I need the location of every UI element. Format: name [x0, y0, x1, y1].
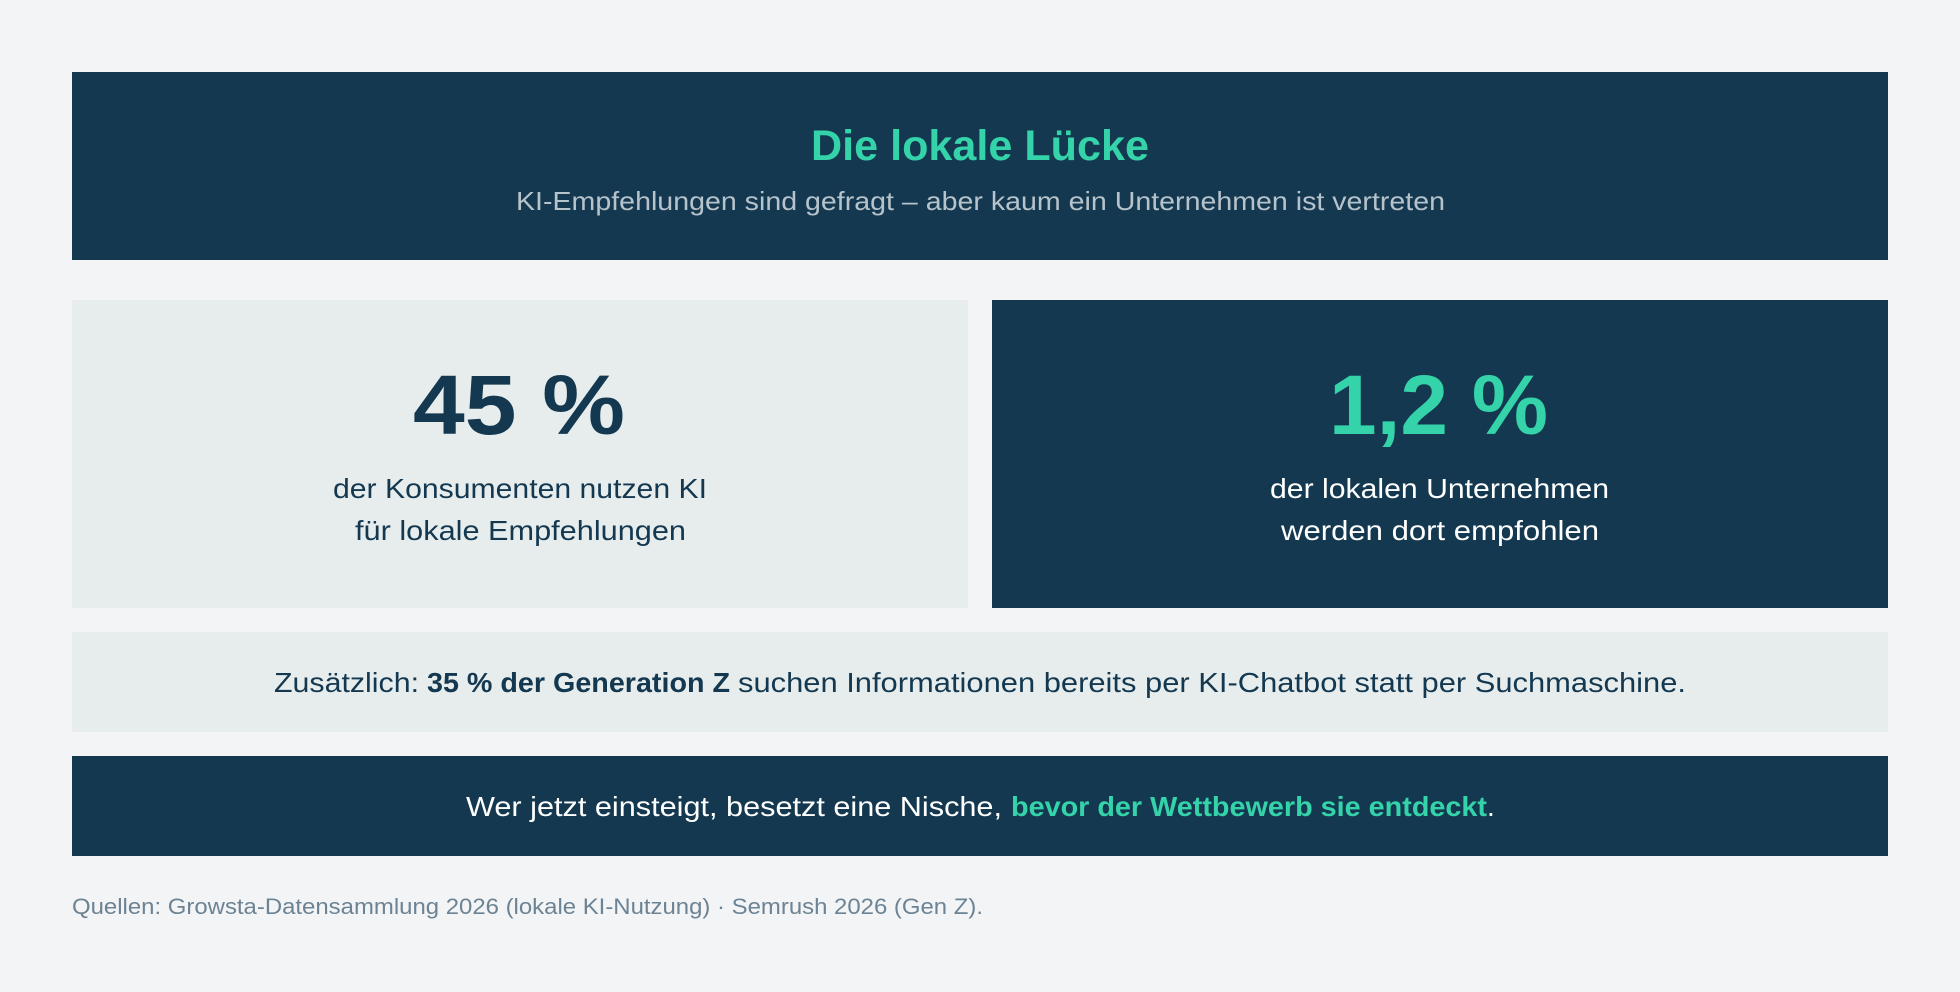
- statistic label: der Konsumenten nutzen KI: [333, 473, 707, 504]
- statistic label: [333, 473, 707, 546]
- statistic label: für lokale Empfehlungen: [355, 515, 686, 546]
- panel: Gen Z note: [72, 632, 1888, 732]
- panel: header: [72, 72, 1888, 260]
- sources footnote: Quellen: Growsta-Datensammlung 2026 (lokale KI-Nutzung) · Semrush 2026 (Gen Z).: [72, 894, 983, 919]
- note text: [274, 667, 1686, 698]
- note text: 35 % der Generation Z: [427, 667, 730, 698]
- statistic label: der lokalen Unternehmen: [1270, 473, 1609, 504]
- panel: call to action: [72, 756, 1888, 856]
- statistic label: [1270, 473, 1609, 546]
- title: Die lokale Lücke: [811, 122, 1149, 170]
- note text: Zusätzlich:: [274, 667, 419, 698]
- big number: 45 %: 45 %: [413, 358, 625, 452]
- call to action text: Wer jetzt einsteigt, besetzt eine Nische,: [466, 791, 1002, 822]
- call to action text: .: [1487, 791, 1495, 822]
- subtitle: KI-Empfehlungen sind gefragt – aber kaum ein Unternehmen ist vertreten: [516, 186, 1445, 216]
- panel: consumer statistic: [72, 300, 968, 608]
- big number: 1,2 %: 1,2 %: [1329, 358, 1548, 452]
- call to action text: bevor der Wettbewerb sie entdeckt: [1011, 791, 1487, 822]
- statistic label: werden dort empfohlen: [1280, 515, 1599, 546]
- note text: suchen Informationen bereits per KI-Chatbot statt per Suchmaschine.: [738, 667, 1686, 698]
- panel: business statistic: [992, 300, 1888, 608]
- call to action text: [466, 791, 1495, 822]
